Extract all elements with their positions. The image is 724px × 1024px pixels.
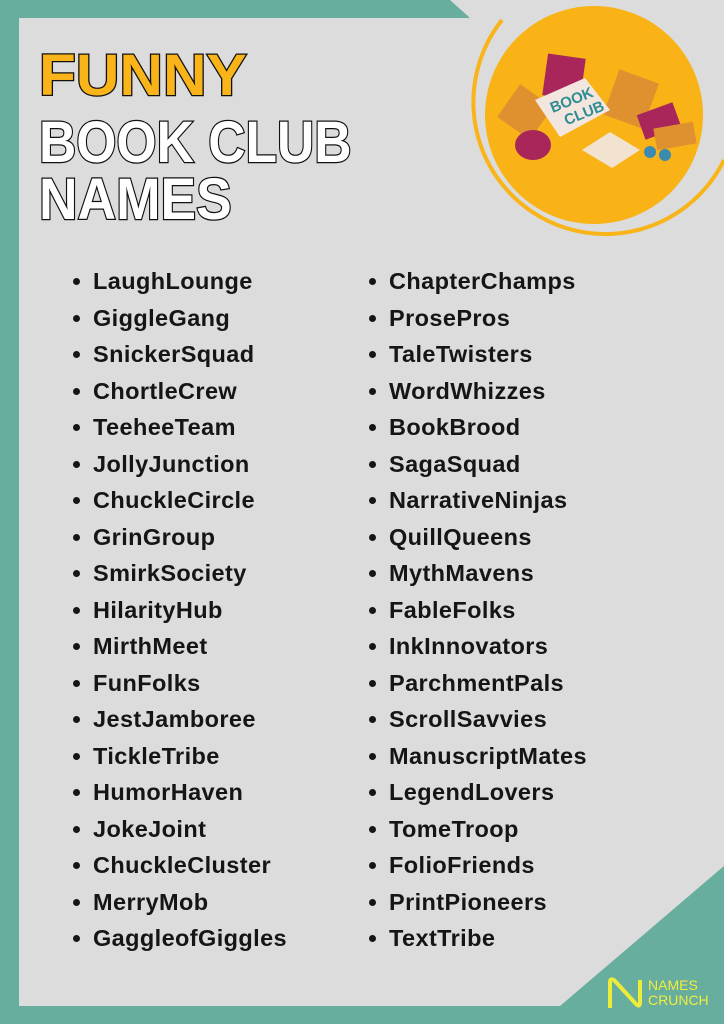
- illustration: book club circle: [471, 6, 724, 236]
- illustration: book club circle: BOOK: [548, 84, 596, 117]
- list: left column: JestJamboree: [93, 706, 256, 732]
- list: right column: WordWhizzes: [389, 378, 546, 404]
- list: left column: LaughLounge: [93, 268, 253, 294]
- list: left column: MerryMob: [93, 888, 208, 914]
- list: left column: ChortleCrew: [93, 378, 237, 404]
- illustration: book club circle: CLUB: [562, 98, 607, 129]
- list: right column: MythMavens: [389, 560, 534, 586]
- list: right column: ManuscriptMates: [389, 742, 587, 768]
- list: left column: MirthMeet: [93, 633, 208, 659]
- logo: names crunch: CRUNCH: [648, 992, 709, 1008]
- title: BOOK CLUB: [39, 110, 352, 175]
- list: left column: GrinGroup: [93, 524, 215, 550]
- list: right column: NarrativeNinjas: [389, 487, 567, 513]
- list: left column: ChuckleCluster: [93, 852, 271, 878]
- list: right column: SagaSquad: [389, 450, 521, 476]
- logo: names crunch: [608, 977, 709, 1008]
- list: left column: HilarityHub: [93, 596, 223, 622]
- list: right column: ParchmentPals: [389, 670, 564, 696]
- list: left column: ChuckleCircle: [93, 487, 255, 513]
- title: [39, 43, 352, 232]
- list: right column: PrintPioneers: [389, 888, 547, 914]
- list: left column: FunFolks: [93, 670, 201, 696]
- list: left column: SmirkSociety: [93, 560, 247, 586]
- list: left column: JokeJoint: [93, 816, 206, 842]
- list: right column: BookBrood: [389, 414, 521, 440]
- list: left column: GiggleGang: [93, 304, 230, 330]
- list: right column: ScrollSavvies: [389, 706, 547, 732]
- list: right column: ProsePros: [389, 304, 510, 330]
- list: right column: [369, 268, 587, 951]
- title: NAMES: [39, 167, 232, 232]
- logo: names crunch: NAMES: [648, 977, 698, 993]
- list: left column: JollyJunction: [93, 450, 250, 476]
- list: right column: FolioFriends: [389, 852, 535, 878]
- list: left column: TeeheeTeam: [93, 414, 236, 440]
- list: right column: ChapterChamps: [389, 268, 576, 294]
- list: left column: SnickerSquad: [93, 341, 255, 367]
- list: left column: GaggleofGiggles: [93, 925, 287, 951]
- list: right column: TaleTwisters: [389, 341, 533, 367]
- list: right column: TomeTroop: [389, 816, 519, 842]
- list: right column: LegendLovers: [389, 779, 554, 805]
- list: left column: TickleTribe: [93, 742, 220, 768]
- list: left column: HumorHaven: [93, 779, 243, 805]
- list: right column: QuillQueens: [389, 524, 532, 550]
- title: FUNNY: [39, 43, 247, 108]
- list: left column: [73, 268, 287, 951]
- list: right column: InkInnovators: [389, 633, 548, 659]
- list: right column: TextTribe: [389, 925, 495, 951]
- list: right column: FableFolks: [389, 596, 516, 622]
